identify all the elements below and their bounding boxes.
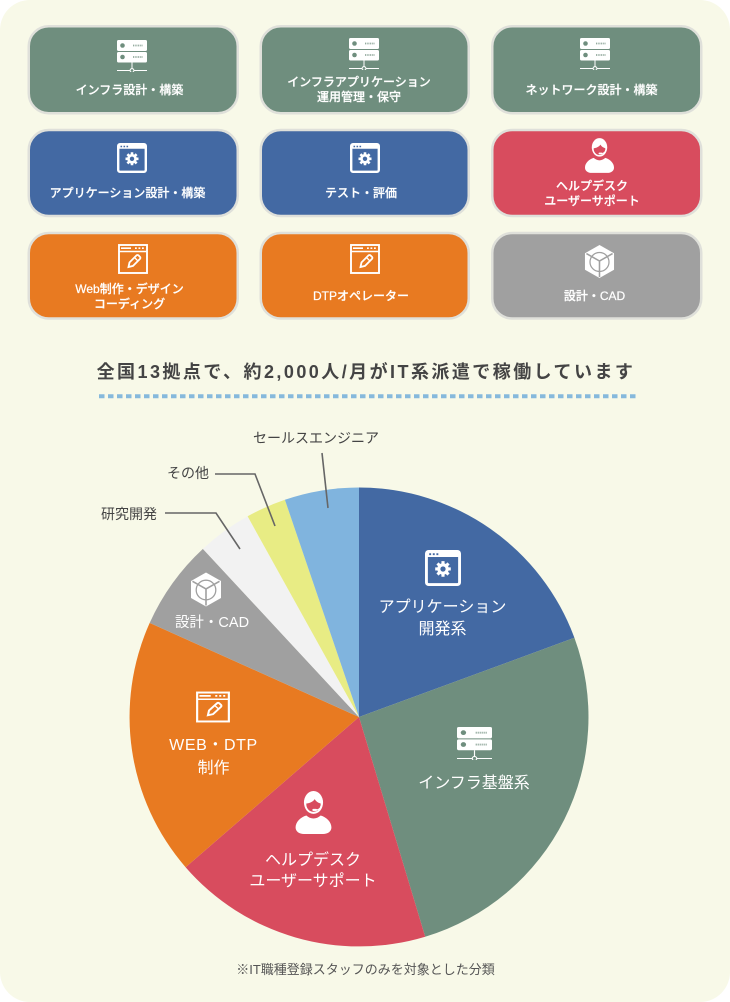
pie label: ヘルプデスク ユーザーサポート: ヘルプデスク	[265, 850, 361, 869]
card: DTPオペレーター: DTPオペレーター	[313, 289, 409, 303]
label: 研究開発: 研究開発	[101, 506, 157, 522]
slice: ヘルプデスク ユーザーサポート	[186, 717, 425, 946]
pie label: インフラ基盤系: インフラ基盤系	[418, 774, 530, 792]
card: Web制作・デザイン コーディング	[29, 233, 238, 318]
pie label: WEB・DTP制作: 制作	[197, 759, 230, 777]
card: ヘルプデスク ユーザーサポート: ユーザーサポート	[544, 194, 640, 208]
card: DTPオペレーター	[261, 233, 469, 318]
pie label: アプリケーション開発系: アプリケーション	[379, 598, 506, 616]
card: Web制作・デザイン コーディング: コーディング	[94, 296, 165, 311]
card: インフラアプリケーション運用管理・保守	[261, 26, 469, 113]
slice: 設計・CAD	[150, 549, 359, 717]
card: インフラ設計・構築	[29, 26, 238, 113]
card: 設計・CAD	[492, 233, 701, 318]
label: セールスエンジニア: セールスエンジニア	[253, 430, 379, 446]
card: ネットワーク設計・構築	[492, 26, 701, 113]
heading: 全国13拠点で、約2,000人/月がIT系派遣で稼働しています	[97, 361, 635, 382]
slice: インフラ基盤系	[359, 638, 588, 937]
slice: アプリケーション開発系	[359, 488, 574, 717]
card: テスト・評価: テスト・評価	[325, 185, 397, 200]
card: ヘルプデスク ユーザーサポート	[492, 130, 701, 216]
slice: WEB・DTP制作	[130, 623, 359, 867]
card: ヘルプデスク ユーザーサポート: ヘルプデスク	[556, 178, 628, 193]
card: 設計・CAD: 設計・CAD	[564, 288, 625, 303]
label: その他	[167, 465, 275, 526]
slice: セールスエンジニア	[285, 488, 359, 717]
card: インフラアプリケーション運用管理・保守: 運用管理・保守	[317, 89, 401, 104]
slice: 研究開発	[203, 516, 359, 717]
card: ネットワーク設計・構築: ネットワーク設計・構築	[525, 82, 658, 97]
pie label: 設計・CAD: 設計・CAD	[175, 614, 249, 631]
pie label: WEB・DTP制作	[169, 693, 258, 777]
pie label: 設計・CAD	[175, 572, 249, 631]
pie label: インフラ基盤系	[418, 727, 530, 792]
slice: その他	[248, 500, 359, 717]
card: テスト・評価	[261, 130, 469, 216]
card: インフラ設計・構築: インフラ設計・構築	[76, 82, 183, 97]
footnote: ※IT職種登録スタッフのみを対象とした分類	[236, 962, 495, 977]
card: Web制作・デザイン コーディング: Web制作・デザイン	[75, 281, 184, 296]
pie label: アプリケーション開発系	[379, 551, 506, 638]
pie chart	[130, 488, 588, 946]
label: セールスエンジニア	[253, 430, 379, 508]
pie label: ヘルプデスク ユーザーサポート	[249, 791, 377, 890]
card: インフラアプリケーション運用管理・保守: インフラアプリケーション	[287, 75, 431, 89]
heading dotted underline	[99, 394, 636, 398]
card: アプリケーション設計・構築: アプリケーション設計・構築	[50, 185, 205, 200]
pie label: ヘルプデスク ユーザーサポート: ユーザーサポート	[249, 872, 377, 890]
label: 研究開発	[101, 506, 240, 549]
card: アプリケーション設計・構築	[29, 130, 238, 216]
label: その他: その他	[167, 465, 209, 481]
pie label: WEB・DTP制作: WEB・DTP	[169, 737, 258, 754]
pie label: アプリケーション開発系: 開発系	[418, 620, 467, 638]
